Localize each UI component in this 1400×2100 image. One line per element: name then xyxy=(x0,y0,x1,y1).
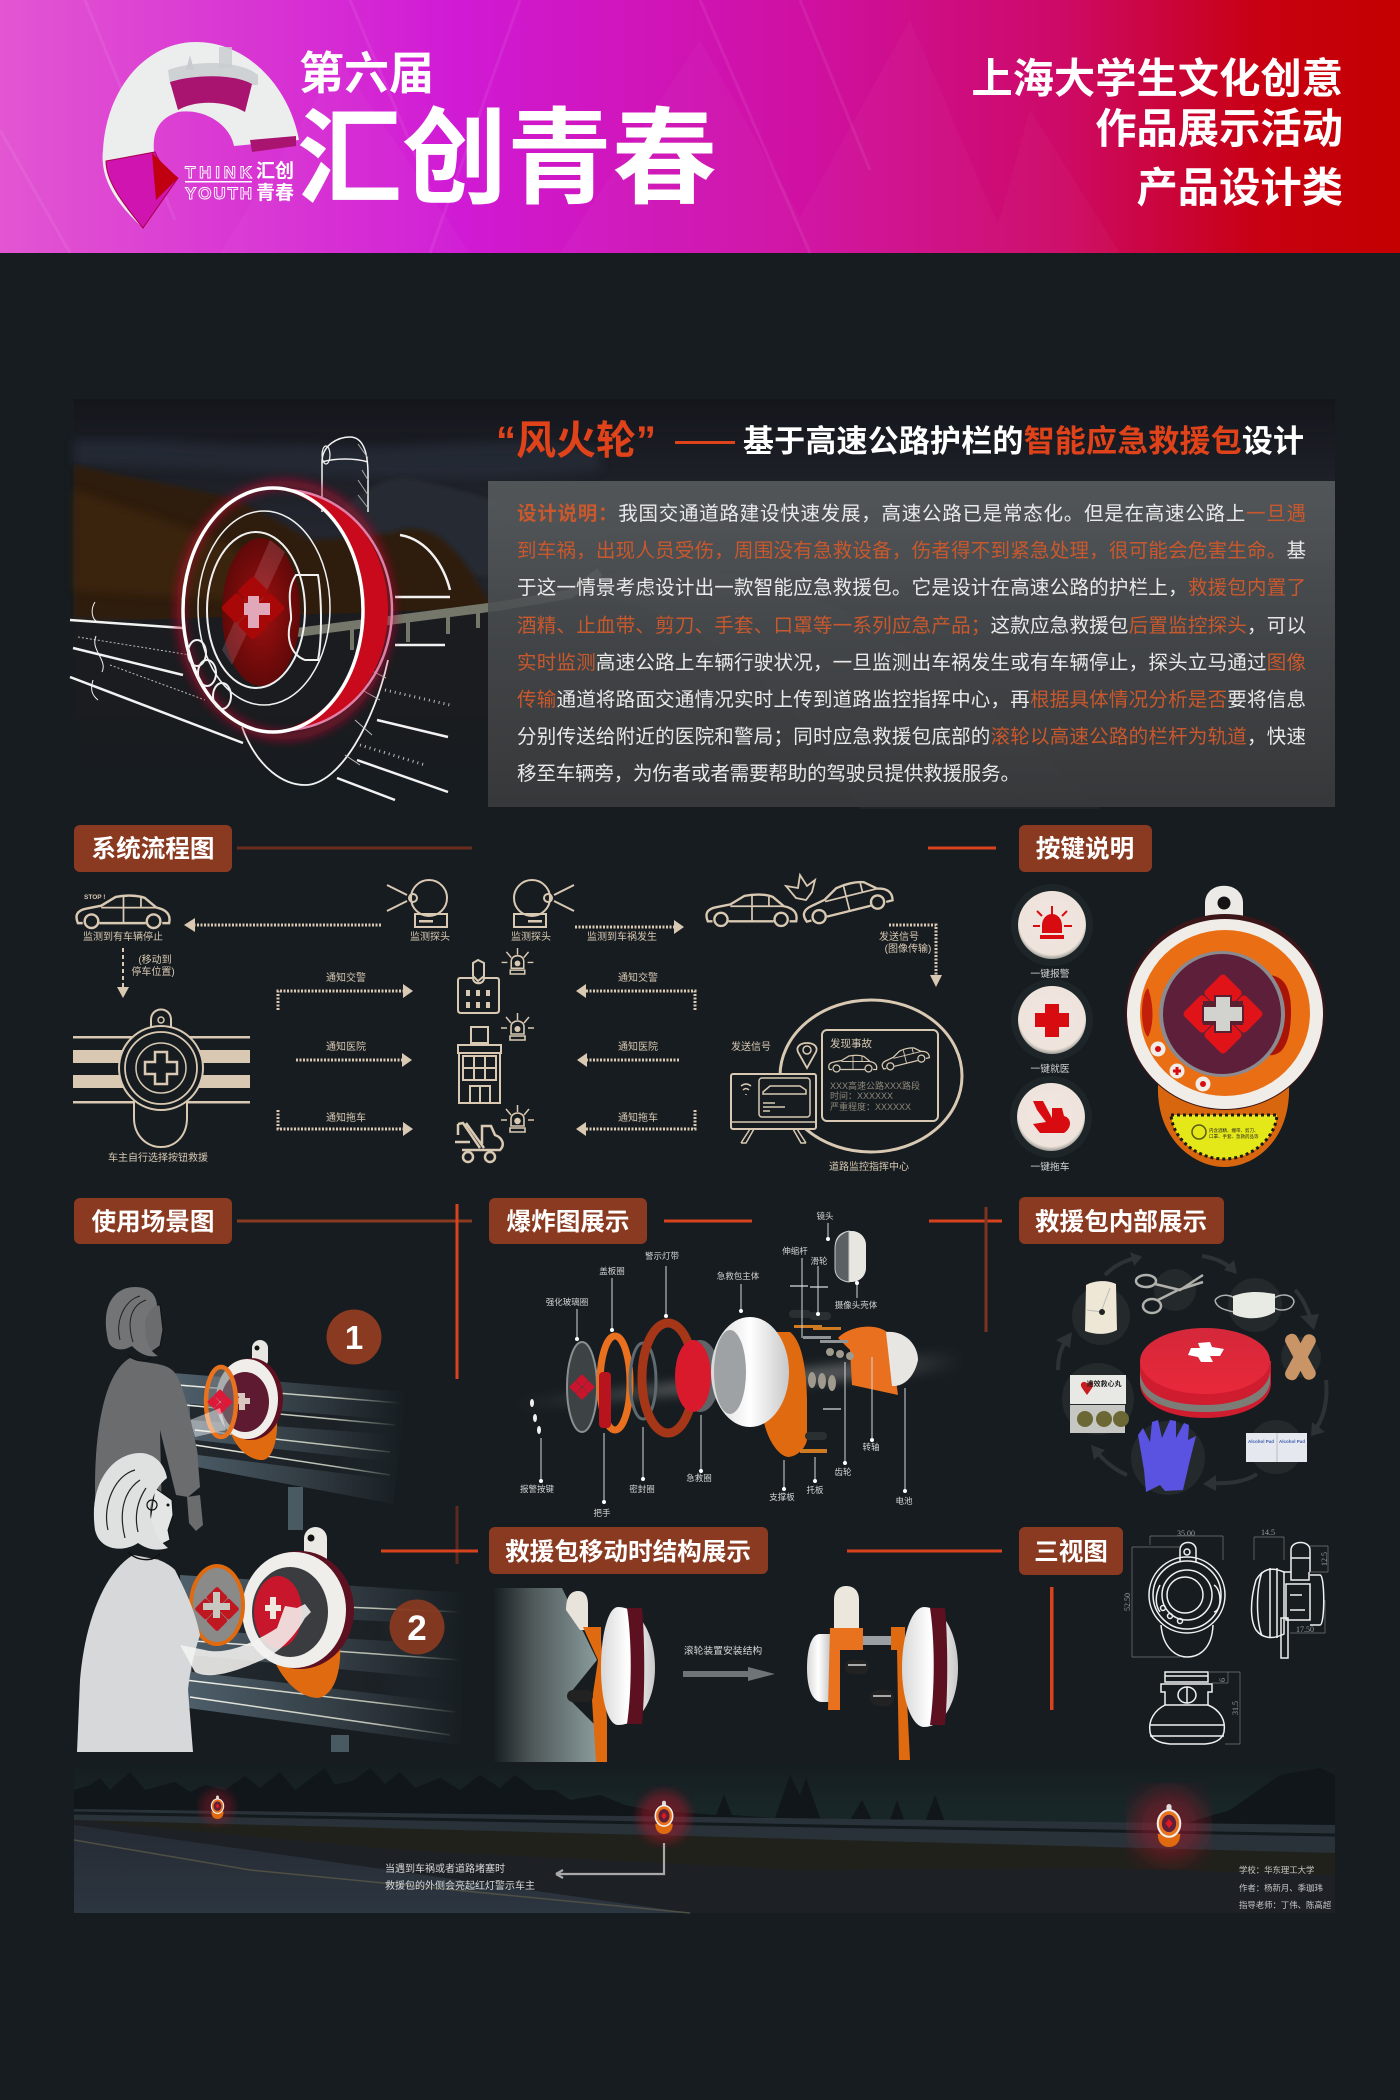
arrow: notify traffic police (right): 通知交警 xyxy=(618,971,658,984)
pills xyxy=(1070,1375,1129,1433)
exploded view: 密封圈 xyxy=(629,1484,655,1494)
pills: 速效救心丸 xyxy=(1086,1379,1122,1388)
system flow chart xyxy=(73,874,962,1173)
inner wheel outlines xyxy=(188,511,330,709)
event subtitle: 作品展示活动 xyxy=(1095,106,1343,152)
hero panel xyxy=(70,399,1335,809)
logo text: THINK xyxy=(185,163,253,182)
person 1 xyxy=(95,1287,203,1531)
heading: kit contents: 救援包内部展示 xyxy=(1035,1208,1207,1236)
arrow: notify hospital (left): 通知医院 xyxy=(326,1040,366,1053)
exploded view: 强化玻璃圈 xyxy=(546,1297,588,1307)
person 2 xyxy=(77,1453,311,1752)
button: one-touch medical: 一键就医 xyxy=(1030,1062,1070,1075)
exposed roller structure xyxy=(807,1586,958,1760)
blue gloves xyxy=(1138,1420,1196,1492)
monitoring center: XXX高速公路XXX路段 xyxy=(830,1080,920,1091)
event edition: 第六届 xyxy=(299,48,434,99)
arrow: notify traffic police (right) xyxy=(576,971,695,1010)
exploded view: 报警按键 xyxy=(520,1484,554,1494)
arrow: to crash: 监测到车祸发生 xyxy=(587,930,657,943)
device on rail xyxy=(73,1010,250,1164)
monitoring center: 严重程度：XXXXXX xyxy=(830,1101,911,1112)
logo text: YOUTH xyxy=(185,184,252,203)
hero title: 基于高速公路护栏的智能应急救援包设计 xyxy=(743,424,1304,459)
number badge 1: 1 xyxy=(345,1319,363,1356)
monitoring center: 道路监控指挥中心 xyxy=(829,1160,909,1173)
credits: 指导老师：丁伟、陈高超 xyxy=(1239,1900,1332,1910)
leader lines and part labels xyxy=(539,1223,907,1504)
monitoring center: 发送信号 xyxy=(731,1040,771,1053)
highway night scene xyxy=(74,1762,1335,1913)
exploded view xyxy=(513,1211,963,1518)
heading: exploded view: 爆炸图展示 xyxy=(507,1208,629,1236)
header banner xyxy=(0,0,1400,253)
exploded view: 电池 xyxy=(895,1496,913,1506)
road and verge xyxy=(74,1820,1335,1913)
adhesive bandages xyxy=(1283,1332,1318,1382)
scenario 1 xyxy=(95,1287,407,1531)
credits xyxy=(1239,1865,1332,1910)
front view: 52.50 xyxy=(1123,1593,1132,1611)
logo text xyxy=(185,160,294,204)
exploded view: 警示灯带 xyxy=(645,1251,679,1261)
event name: 汇创青春 xyxy=(297,101,717,218)
heading: usage scenario xyxy=(74,1198,232,1244)
movement structure xyxy=(493,1586,958,1768)
arrow with label xyxy=(683,1644,775,1681)
face mask xyxy=(1215,1292,1294,1318)
alcohol pads xyxy=(1246,1433,1307,1462)
arrow: signal down: 发送信号 xyxy=(879,930,919,943)
number badge 1 xyxy=(326,1310,382,1364)
glowing ring xyxy=(180,484,392,736)
arrow: notify hospital (left) xyxy=(296,1040,412,1067)
stopped car: 监测到有车辆停止 xyxy=(83,930,163,943)
alcohol pads: Alcohol Pad xyxy=(1248,1439,1274,1444)
icon: tow truck xyxy=(455,1105,534,1162)
side view: 17.50 xyxy=(1296,1625,1314,1634)
arrow: move to stopped car: (移动到 xyxy=(138,953,172,966)
heading: kit contents xyxy=(1019,1197,1224,1244)
bandage roll xyxy=(1085,1281,1117,1334)
number badge 2: 2 xyxy=(407,1609,427,1648)
side view: 12.5 xyxy=(1320,1552,1329,1566)
heading: system flow: 系统流程图 xyxy=(92,835,214,863)
device mini buttons xyxy=(1150,1042,1210,1092)
arrow: notify tow truck (right): 通知拖车 xyxy=(618,1111,658,1124)
right camera: 监测探头 xyxy=(511,930,551,943)
exploded view: 急救圈 xyxy=(686,1473,712,1483)
heading: button guide: 按键说明 xyxy=(1036,835,1134,863)
red first-aid kit xyxy=(1140,1328,1271,1418)
monitoring center: 发现事故 xyxy=(830,1037,872,1050)
arrow: notify tow truck (left) xyxy=(278,1110,413,1136)
heading: usage scenario: 使用场景图 xyxy=(92,1208,214,1236)
design description text: 酒精、止血带、剪刀、手套、口罩等一系列应急产品；这款应急救援包后置监控探头，可以 xyxy=(517,615,1306,637)
left camera xyxy=(387,880,450,943)
front view: 35.00 xyxy=(1177,1529,1195,1538)
warning caption: 救援包的外侧会亮起红灯警示车主 xyxy=(385,1879,535,1892)
arrow: signal down: (图像传输) xyxy=(885,942,931,955)
arrow: move to stopped car xyxy=(117,948,175,998)
device red cross emblem xyxy=(1182,973,1264,1055)
left camera: 监测探头 xyxy=(410,930,450,943)
heading: three views: 三视图 xyxy=(1034,1538,1108,1566)
design description panel xyxy=(488,481,1335,807)
event subtitle: 上海大学生文化创意 xyxy=(971,56,1343,102)
exploded view: 伸缩杆 xyxy=(782,1246,808,1256)
event subtitle xyxy=(971,56,1343,211)
device on rail: 车主自行选择按钮救援 xyxy=(108,1151,208,1164)
button: one-touch tow: 一键拖车 xyxy=(1030,1160,1070,1173)
parts xyxy=(530,1231,918,1457)
bottom view xyxy=(1150,1672,1240,1744)
front view xyxy=(1123,1529,1225,1657)
icon: hospital xyxy=(458,1013,534,1103)
monitoring center xyxy=(731,1000,962,1173)
bottom view: 31.5 xyxy=(1231,1701,1240,1715)
exploded view: 镜头 xyxy=(816,1211,834,1221)
guardrail 2 xyxy=(180,1575,467,1752)
cycle arrows and backdrop circles xyxy=(1056,1252,1326,1495)
button: one-touch tow xyxy=(1010,1076,1092,1173)
logo xyxy=(103,42,299,228)
icon: police station xyxy=(458,948,533,1013)
button: one-touch medical xyxy=(1011,979,1093,1075)
button: one-touch alarm xyxy=(1011,884,1093,980)
arrow to caption xyxy=(556,1843,664,1878)
crash cars xyxy=(706,874,894,927)
side view: 14.5 xyxy=(1261,1528,1275,1537)
credits: 作者：杨新月、季珈玮 xyxy=(1239,1883,1323,1893)
device open 1 xyxy=(190,1340,283,1460)
exploded view: 把手 xyxy=(593,1508,611,1518)
scissors xyxy=(1136,1275,1203,1313)
number badge 2 xyxy=(390,1600,444,1654)
tree silhouettes xyxy=(74,1768,1335,1840)
exploded view: 齿轮 xyxy=(834,1467,852,1477)
light streak xyxy=(513,1350,963,1410)
kit contents xyxy=(1056,1252,1326,1495)
logo text: 青春 xyxy=(256,182,294,204)
device open 2 xyxy=(191,1527,354,1698)
heading: button guide xyxy=(1019,825,1152,872)
mounted on guardrail xyxy=(493,1588,655,1768)
right camera xyxy=(511,880,574,943)
arrow: notify traffic police (left): 通知交警 xyxy=(326,971,366,984)
arrow: move to stopped car: 停车位置) xyxy=(131,965,175,978)
product front view: 内含酒精、绷带、剪刀、 xyxy=(1209,1127,1258,1134)
hero line drawing of the device xyxy=(70,437,450,800)
monitoring center: 时间：XXXXXX xyxy=(830,1090,893,1101)
arrow: notify tow truck (left): 通知拖车 xyxy=(326,1111,366,1124)
button: one-touch alarm: 一键报警 xyxy=(1030,967,1070,980)
warning caption xyxy=(385,1862,535,1892)
product front view: 口罩、手套、急救药品等 xyxy=(1209,1133,1259,1140)
hero red cross emblem xyxy=(221,576,285,640)
stopped car xyxy=(76,894,170,943)
hero title: “风火轮” xyxy=(496,419,656,463)
exploded view: 急救包主体 xyxy=(717,1271,760,1281)
heading: exploded view xyxy=(489,1198,647,1244)
design description text: 传输通道将路面交通情况实时上传到道路监控指挥中心，再根据具体情况分析是否要将信息 xyxy=(517,689,1306,711)
hero title xyxy=(496,419,1304,463)
credits: 学校：华东理工大学 xyxy=(1239,1865,1314,1875)
arrow: notify traffic police (left) xyxy=(278,971,413,1010)
stopped car: STOP ! xyxy=(84,894,105,901)
three view drawings xyxy=(1123,1528,1329,1744)
heading: system flow xyxy=(74,825,232,872)
guardrail 1 xyxy=(173,1373,407,1530)
arrow: to stopped car xyxy=(184,918,381,932)
heading: movement structure xyxy=(489,1527,768,1574)
warning caption: 当遇到车祸或者道路堵塞时 xyxy=(385,1862,505,1875)
bottom view: 6 xyxy=(1218,1678,1227,1682)
arrow with label: 滚轮装置安装结构 xyxy=(684,1644,762,1657)
alcohol pads: Alcohol Pad xyxy=(1279,1439,1305,1444)
arrow: to crash xyxy=(575,920,684,943)
arrow: signal down xyxy=(879,925,942,987)
guardrail xyxy=(74,1809,1335,1853)
design description text: 实时监测高速公路上车辆行驶状况，一旦监测出车祸发生或有车辆停止，探头立马通过图像 xyxy=(517,652,1306,674)
exploded view: 盖板圈 xyxy=(599,1266,625,1276)
exploded view: 支撑板 xyxy=(769,1492,795,1502)
red warning devices xyxy=(200,1790,1205,1862)
exploded view: 转轴 xyxy=(862,1442,880,1452)
design description text: 设计说明：我国交通道路建设快速发展，高速公路已是常态化。但是在高速公路上一旦遇 xyxy=(517,503,1306,525)
arrow: notify tow truck (right) xyxy=(576,1110,695,1136)
exploded view: 滑轮 xyxy=(810,1256,828,1266)
scenario 2 xyxy=(77,1453,467,1752)
hero photo background xyxy=(74,399,1335,809)
design description text: 移至车辆旁，为伤者或者需要帮助的驾驶员提供救援服务。 xyxy=(517,763,1020,785)
design description text: 到车祸，出现人员受伤，周围没有急救设备，伤者得不到紧急处理，很可能会危害生命。基 xyxy=(517,540,1306,562)
event subtitle: 产品设计类 xyxy=(1136,165,1343,211)
product front view xyxy=(1125,886,1325,1167)
heading: movement structure: 救援包移动时结构展示 xyxy=(505,1538,751,1566)
logo text: 汇创 xyxy=(256,160,294,182)
exploded view: 托板 xyxy=(806,1485,824,1495)
design description text xyxy=(517,503,1306,785)
arrow: notify hospital (right) xyxy=(577,1040,679,1067)
design description text: 于这一情景考虑设计出一款智能应急救援包。它是设计在高速公路的护栏上，救援包内置了 xyxy=(517,577,1306,599)
arrow: notify hospital (right): 通知医院 xyxy=(618,1040,658,1053)
design description text: 分别传送给附近的医院和警局；同时应急救援包底部的滚轮以高速公路的栏杆为轨道，快速 xyxy=(517,726,1306,748)
heading: three views xyxy=(1019,1527,1123,1575)
exploded view: 摄像头壳体 xyxy=(835,1300,878,1310)
side view xyxy=(1252,1528,1329,1658)
